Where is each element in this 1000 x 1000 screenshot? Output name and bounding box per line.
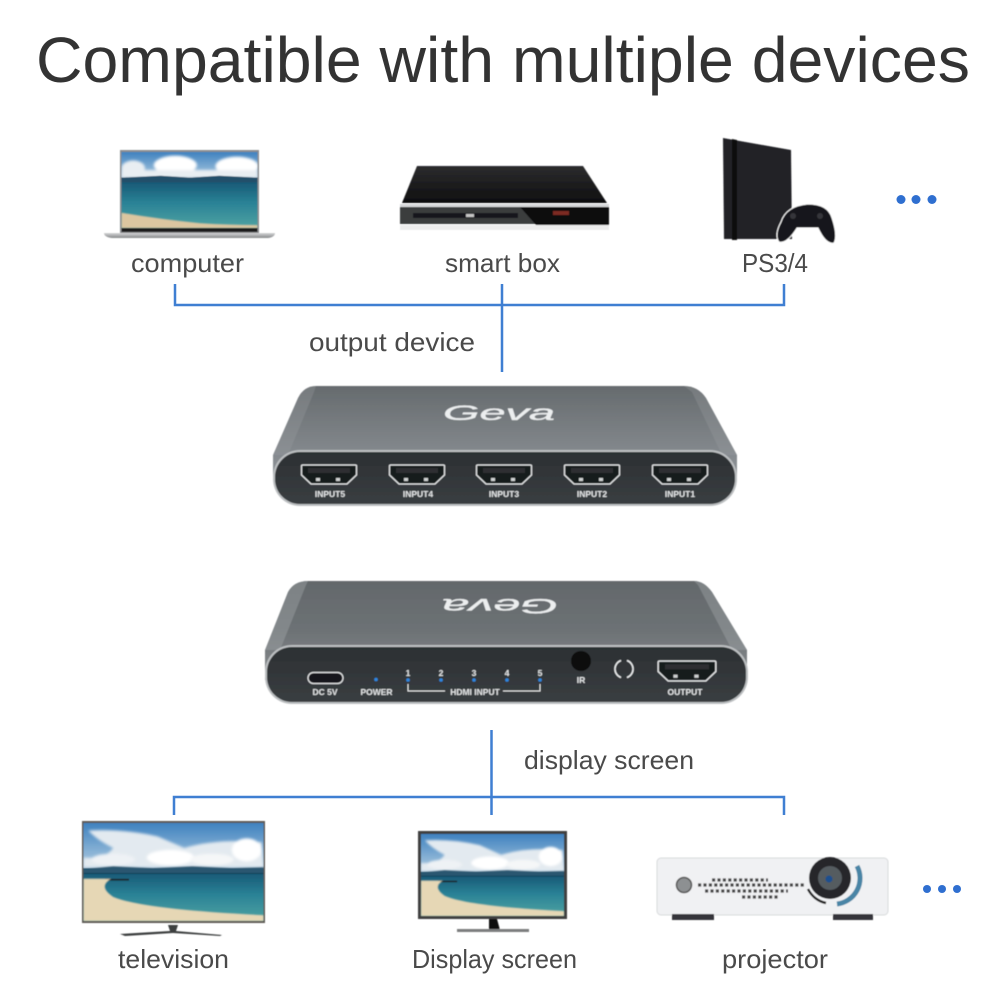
- indicators: HDMI input LEDs: 3: [472, 668, 477, 678]
- ports: HDMI inputs: INPUT5: [315, 489, 345, 499]
- icon: PS4 console with controller: [723, 138, 836, 243]
- port: HDMI output: OUTPUT: [668, 687, 703, 697]
- icon: more display devices: [923, 885, 961, 893]
- logo: Geva: Geva: [443, 402, 555, 425]
- ports: HDMI inputs: INPUT1: [665, 489, 695, 499]
- icon: laptop computer: [104, 150, 275, 238]
- label: projector: projector: [722, 944, 828, 974]
- icon: smart box: [400, 166, 609, 230]
- sensor: IR: IR: [577, 675, 585, 685]
- label: smart box: smart box: [445, 248, 560, 278]
- port: USB-C power: [308, 672, 343, 697]
- connector: switch to display devices: [174, 730, 784, 815]
- indicator: power LED: POWER: [360, 687, 393, 697]
- port: USB-C power: DC 5V: [312, 687, 338, 697]
- indicators: HDMI input LEDs: 5: [538, 668, 543, 678]
- label: computer: computer: [131, 248, 244, 278]
- connector: input devices to switch: [175, 284, 784, 372]
- indicators: HDMI input LEDs: HDMI INPUT: [450, 687, 501, 697]
- indicators: HDMI input LEDs: [406, 668, 543, 697]
- title: Compatible with multiple devices: [36, 24, 970, 96]
- switch: input side: [273, 386, 737, 506]
- ports: HDMI inputs: INPUT4: [403, 489, 433, 499]
- icon: more input devices: [896, 195, 936, 204]
- label: television: television: [118, 944, 229, 974]
- logo: Geva upside down: Geva: [442, 594, 558, 617]
- indicators: HDMI input LEDs: 2: [439, 668, 444, 678]
- indicators: HDMI input LEDs: 1: [406, 668, 411, 678]
- indicators: HDMI input LEDs: 4: [505, 668, 510, 678]
- label: Display screen: Display screen: [412, 944, 577, 974]
- sensor: IR: [571, 651, 591, 685]
- switch: output side: [265, 581, 748, 704]
- icon: display monitor: [418, 831, 567, 932]
- label: output device: output device: [309, 327, 475, 357]
- ports: HDMI inputs: [302, 465, 708, 499]
- button: switch ring: [615, 660, 633, 678]
- label: PS3/4: PS3/4: [742, 248, 808, 278]
- ports: HDMI inputs: INPUT3: [489, 489, 519, 499]
- icon: projector: [657, 857, 888, 920]
- label: display screen: display screen: [524, 745, 694, 775]
- indicator: power LED: [360, 678, 393, 697]
- port: HDMI output: [658, 661, 716, 697]
- ports: HDMI inputs: INPUT2: [577, 489, 607, 499]
- icon: television: [82, 821, 265, 936]
